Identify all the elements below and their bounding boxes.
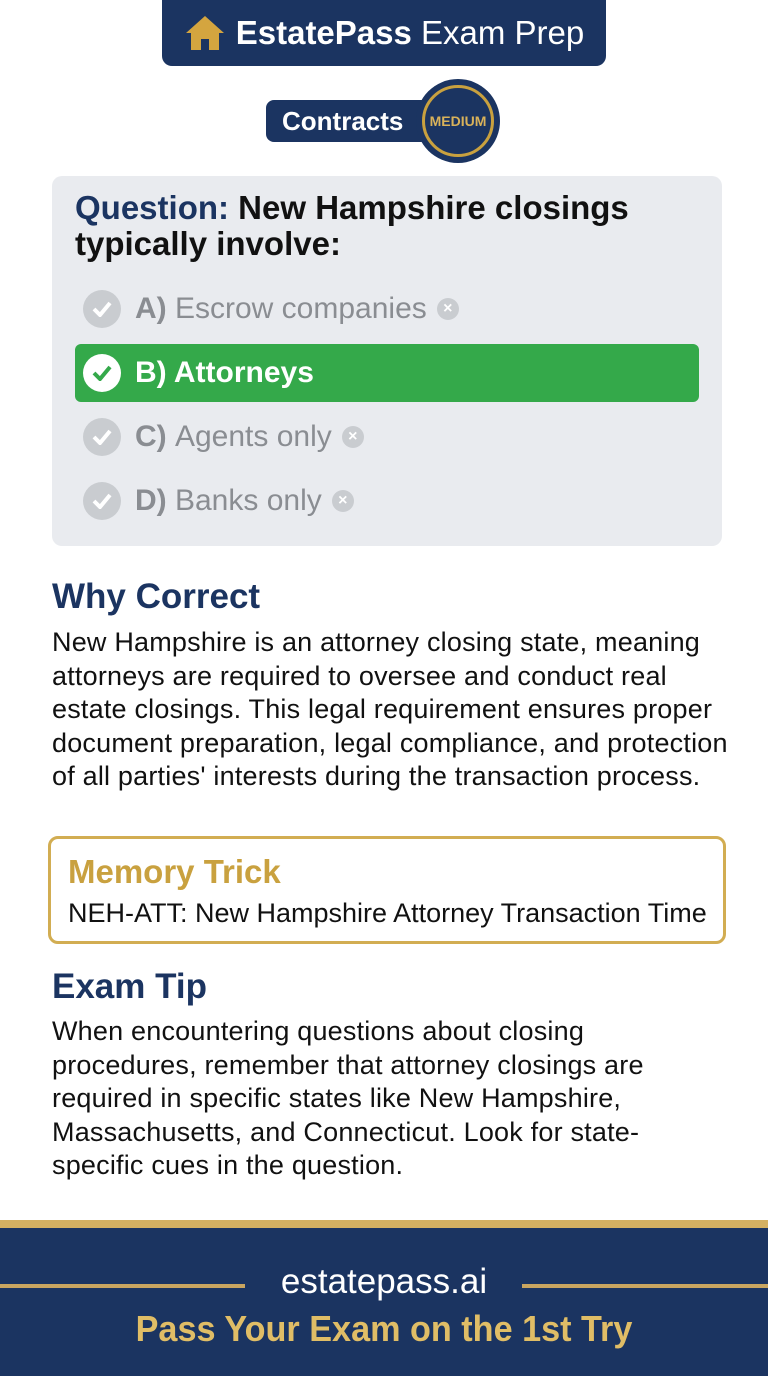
icon: house	[186, 16, 224, 50]
heading: exam tip: Exam Tip	[52, 967, 207, 1006]
option C: C)	[135, 420, 167, 453]
panel: question	[52, 176, 722, 546]
option B correct: B) Attorneys	[135, 356, 314, 389]
option D	[83, 482, 354, 520]
option A: Escrow companies	[175, 292, 427, 325]
option D: ×	[338, 492, 347, 509]
footer tagline: Pass Your Exam on the 1st Try	[136, 1308, 632, 1349]
footer url: estatepass.ai	[281, 1262, 487, 1301]
question text	[75, 189, 629, 262]
difficulty badge	[416, 79, 500, 163]
option C	[83, 418, 364, 456]
question text: Question: New Hampshire closings	[75, 189, 629, 226]
option A	[83, 290, 459, 328]
category pill	[266, 100, 436, 142]
heading: why correct: Why Correct	[52, 577, 260, 616]
option D: Banks only	[175, 484, 322, 517]
option C: Agents only	[175, 420, 332, 453]
text: exam tip: When encountering questions about closing procedures, remember that attorney closings are required in specific states like New Hampshire, Massachusetts, and Connecticut. Look for state-specific cues in the question.	[52, 1016, 644, 1180]
header banner: EstatePass Exam Prep	[236, 14, 584, 51]
option B correct	[75, 344, 699, 402]
panel: memory trick	[48, 836, 726, 944]
option A: A)	[135, 292, 167, 325]
option D: D)	[135, 484, 167, 517]
footer	[0, 1220, 768, 1376]
option A: ×	[443, 300, 452, 317]
difficulty badge: MEDIUM	[430, 113, 486, 129]
memory text: NEH-ATT: New Hampshire Attorney Transaction Time	[68, 898, 707, 928]
question text: typically involve:	[75, 225, 341, 262]
option C: ×	[348, 428, 357, 445]
memory title: Memory Trick	[68, 853, 281, 890]
header banner	[162, 0, 606, 66]
category pill: Contracts	[282, 106, 403, 136]
text: explanation: New Hampshire is an attorney closing state, meaning attorneys are required to oversee and conduct real estate closings. This legal requirement ensures proper document preparation, legal compliance, and protection of all parties' interests during the transaction process.	[52, 627, 728, 791]
